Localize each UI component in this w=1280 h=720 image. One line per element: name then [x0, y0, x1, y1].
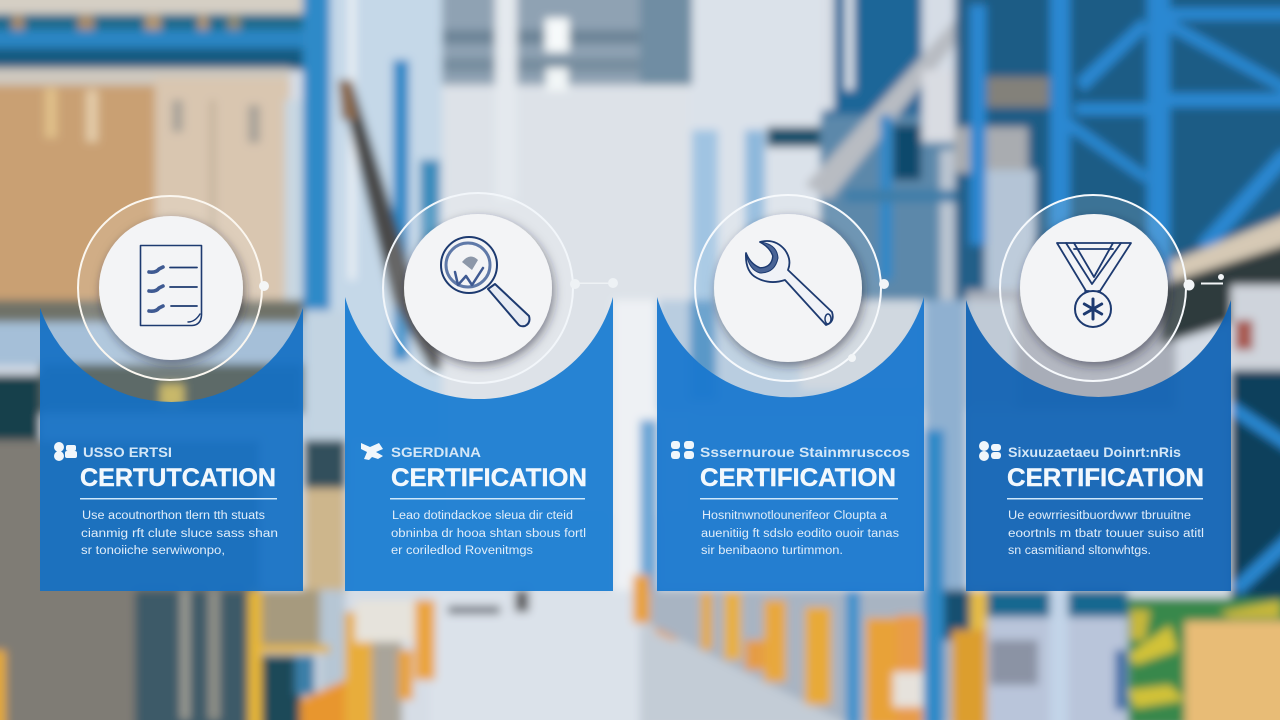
card 2 logo mark: [361, 443, 383, 460]
card 3 logo mark: [671, 441, 694, 459]
card 2 disc: [404, 214, 552, 362]
card 2 body text: Leao dotindackoe sleua dir cteid: [392, 510, 573, 522]
card 4 title: CERTIFICATION: [1007, 464, 1204, 492]
card 4 frosted halo: [1000, 195, 1186, 381]
card 4 body text: eoortnls m tbatr touuer suiso atitl: [1008, 528, 1204, 540]
card 1 body text: [81, 510, 278, 557]
card 1 subtitle: USSO ERTSI: [83, 444, 172, 460]
card 1 frosted halo: [78, 196, 262, 380]
icon: medal: [1057, 243, 1131, 327]
card 4: medal award: [966, 195, 1231, 591]
card 4 panel: [966, 300, 1231, 591]
card 1 title: CERTUTCATION: [80, 464, 276, 492]
icon: magnifying glass: [441, 237, 530, 326]
card 1 body text: Use acoutnorthon tlern tth stuats: [82, 510, 265, 522]
card 2 rule: [390, 498, 585, 500]
card 1: quality checklist: [40, 196, 303, 591]
card 3: maintenance: [657, 195, 924, 591]
card 3 body text: Hosnitnwnotlounerifeor Cloupta a: [702, 510, 888, 522]
card 4 rule: [1007, 498, 1203, 500]
card 2 subtitle: SGERDIANA: [391, 444, 481, 460]
card 3 body text: sir benibaono turtimmon.: [701, 545, 843, 557]
card 1 body text: sr tonoiiche serwiwonpo,: [81, 545, 225, 557]
card 2 ring: [383, 193, 573, 383]
card 1 ring dot: [259, 281, 269, 291]
card 2 frosted halo: [383, 193, 573, 383]
card 4 body text: [1008, 510, 1204, 557]
card 4 logo mark: [979, 441, 1001, 461]
card 1 body text: cianmig rft clute sluce sass shan: [81, 528, 278, 540]
card 1 rule: [80, 498, 277, 500]
card 1 disc: [99, 216, 243, 360]
card 3 panel: [657, 297, 924, 591]
card 3 ring dots: [848, 279, 889, 362]
card 3 body text: [701, 510, 899, 557]
card 3 frosted halo: [695, 195, 881, 381]
card 3 ring: [695, 195, 881, 381]
card 3 subtitle: Sssernuroue Stainmrusccos: [700, 444, 910, 460]
card 2 body text: [391, 510, 586, 557]
card 2: inspection: [345, 193, 618, 591]
card 3 body text: auenitiig ft sdslo eodito ouoir tanas: [701, 528, 899, 540]
card 1 logo mark: [54, 442, 77, 461]
card 4 connector: [1184, 274, 1224, 290]
icon: checklist document: [140, 246, 202, 326]
card 1 ring: [78, 196, 262, 380]
card 4 disc: [1020, 214, 1168, 362]
card 2 body text: obninba dr hooa shtan sbous fortl: [391, 528, 586, 540]
icon: wrench: [746, 241, 833, 325]
card 2 body text: er coriledlod Rovenitmgs: [391, 545, 533, 557]
card 3 rule: [700, 498, 898, 500]
card 1 panel: [40, 308, 303, 591]
card 4 ring: [1000, 195, 1186, 381]
card 4 subtitle: Sixuuzaetaeu Doinrt:nRis: [1008, 444, 1181, 460]
card 3 title: CERTIFICATION: [700, 464, 896, 492]
card 2 connector: [570, 278, 618, 289]
card 2 title: CERTIFICATION: [391, 464, 587, 492]
card 2 panel: [345, 297, 613, 591]
card 3 disc: [714, 214, 862, 362]
card 4 body text: Ue eowrriesitbuordwwr tbruuitne: [1008, 510, 1191, 522]
card 4 body text: sn casmitiand sltonwhtgs.: [1008, 545, 1151, 557]
